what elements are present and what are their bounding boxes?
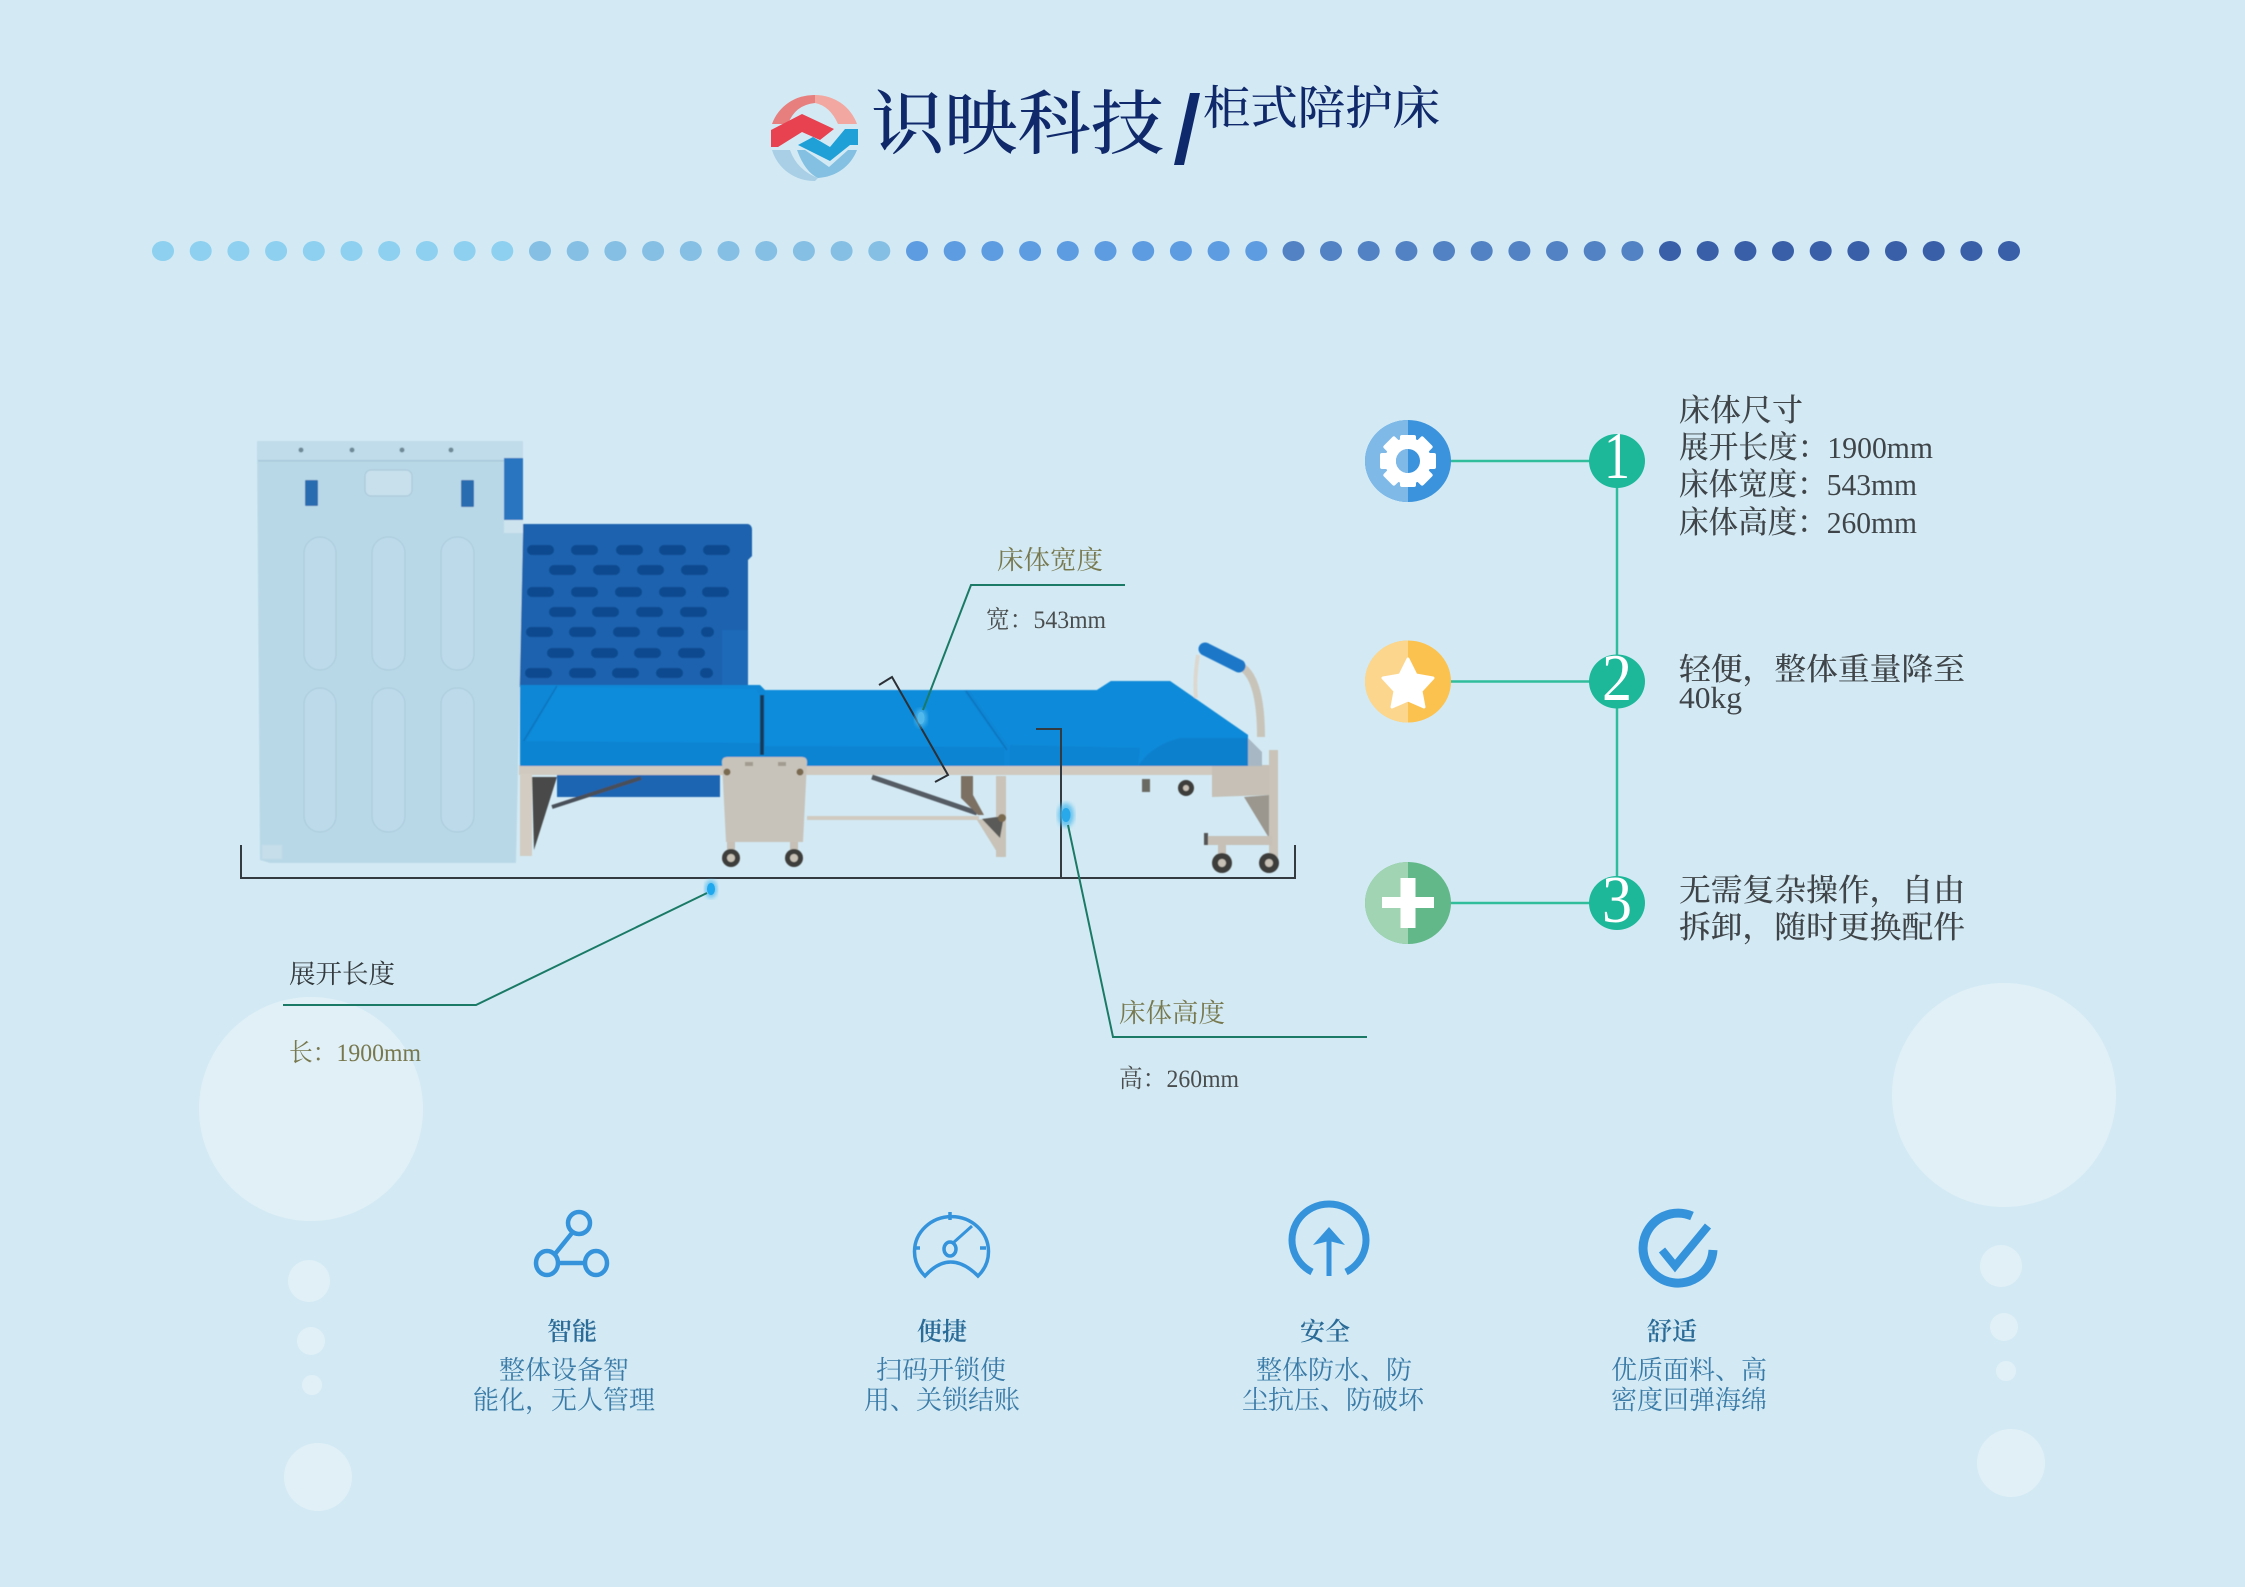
- icon: company logo: [771, 95, 858, 181]
- feature: convenient: 扫码开锁使: [876, 1356, 1006, 1385]
- decorative bubbles left: [199, 997, 423, 1511]
- feature: convenient: [864, 1318, 1020, 1415]
- feature: safe: [1242, 1318, 1425, 1415]
- text block: bed dimensions: 床体尺寸: [1679, 385, 1803, 430]
- text block: easy assembly: [1679, 873, 1965, 946]
- feature icon: gauge: [914, 1212, 989, 1276]
- feature icon: smart nodes: [536, 1212, 607, 1275]
- icon: gear: [1365, 420, 1451, 502]
- label: bed width: [986, 540, 1107, 634]
- dimension bracket: height: [1036, 729, 1061, 878]
- label: bed height: 高：260mm: [1119, 1065, 1240, 1093]
- text block: bed dimensions: 床体宽度：543mm: [1679, 467, 1917, 502]
- frame and legs: [519, 649, 1279, 873]
- label: bed width: 宽：543mm: [986, 606, 1107, 634]
- badge 1: 1: [1604, 419, 1630, 493]
- badge 3: 3: [1602, 863, 1632, 937]
- feature: comfortable: 舒适: [1647, 1318, 1697, 1346]
- leader: unfolded length: [283, 880, 717, 1005]
- dotted divider: [152, 241, 2020, 261]
- feature: convenient: 便捷: [917, 1318, 967, 1346]
- control box: [722, 757, 807, 867]
- text block: lightweight: 40kg: [1679, 680, 1742, 715]
- icon: plus: [1365, 862, 1451, 944]
- feature: smart: [473, 1318, 655, 1415]
- text block: easy assembly: 无需复杂操作，自由: [1679, 873, 1965, 909]
- title slash: [1174, 93, 1200, 165]
- leader: bed height: [1058, 803, 1367, 1037]
- dimension bracket: length: [241, 845, 1295, 878]
- decorative bubbles right: [1892, 983, 2116, 1497]
- feature: comfortable: 优质面料、高: [1611, 1356, 1767, 1385]
- label: unfolded length: [289, 954, 422, 1067]
- badge 2: 2: [1602, 641, 1632, 715]
- feature: smart: 整体设备智: [499, 1356, 629, 1385]
- text block: bed dimensions: 床体高度：260mm: [1679, 505, 1917, 540]
- text block: bed dimensions: [1679, 385, 1933, 540]
- text block: lightweight: 轻便，整体重量降至: [1679, 644, 1965, 689]
- label: bed width: 床体宽度: [997, 540, 1103, 577]
- text block: easy assembly: 拆卸，随时更换配件: [1679, 910, 1965, 946]
- timeline connectors: [1408, 461, 1617, 903]
- feature: smart: 智能: [547, 1318, 597, 1346]
- text block: bed dimensions: 展开长度：1900mm: [1679, 430, 1933, 465]
- feature: safe: 安全: [1300, 1318, 1350, 1346]
- subtitle: 柜式陪护床: [1203, 72, 1440, 138]
- badge 1: [1589, 419, 1645, 493]
- feature: safe: 整体防水、防: [1256, 1356, 1412, 1385]
- leader: bed width: [915, 585, 1125, 727]
- badge 3: [1589, 863, 1645, 937]
- label: unfolded length: 展开长度: [289, 954, 395, 991]
- title: 识映科技: [871, 68, 1164, 169]
- dimension bracket: width: [879, 677, 948, 782]
- cabinet: [257, 441, 523, 863]
- feature icon: upload circle: [1292, 1204, 1366, 1276]
- feature: safe: 尘抗压、防破坏: [1242, 1386, 1425, 1415]
- icon: star: [1365, 640, 1451, 722]
- feature: comfortable: [1611, 1318, 1767, 1415]
- feature icon: check circle: [1643, 1213, 1713, 1283]
- mattress: [520, 681, 1262, 766]
- feature: smart: 能化，无人管理: [473, 1386, 655, 1415]
- label: bed height: [1119, 993, 1240, 1093]
- feature: convenient: 用、关锁结账: [864, 1386, 1020, 1415]
- label: unfolded length: 长：1900mm: [289, 1039, 422, 1067]
- text block: lightweight: [1679, 644, 1965, 715]
- label: bed height: 床体高度: [1119, 993, 1225, 1030]
- feature: comfortable: 密度回弹海绵: [1611, 1386, 1767, 1415]
- illustration: folding cabinet bed: [257, 441, 1279, 873]
- badge 2: [1589, 641, 1645, 715]
- blue back panel: [518, 524, 752, 797]
